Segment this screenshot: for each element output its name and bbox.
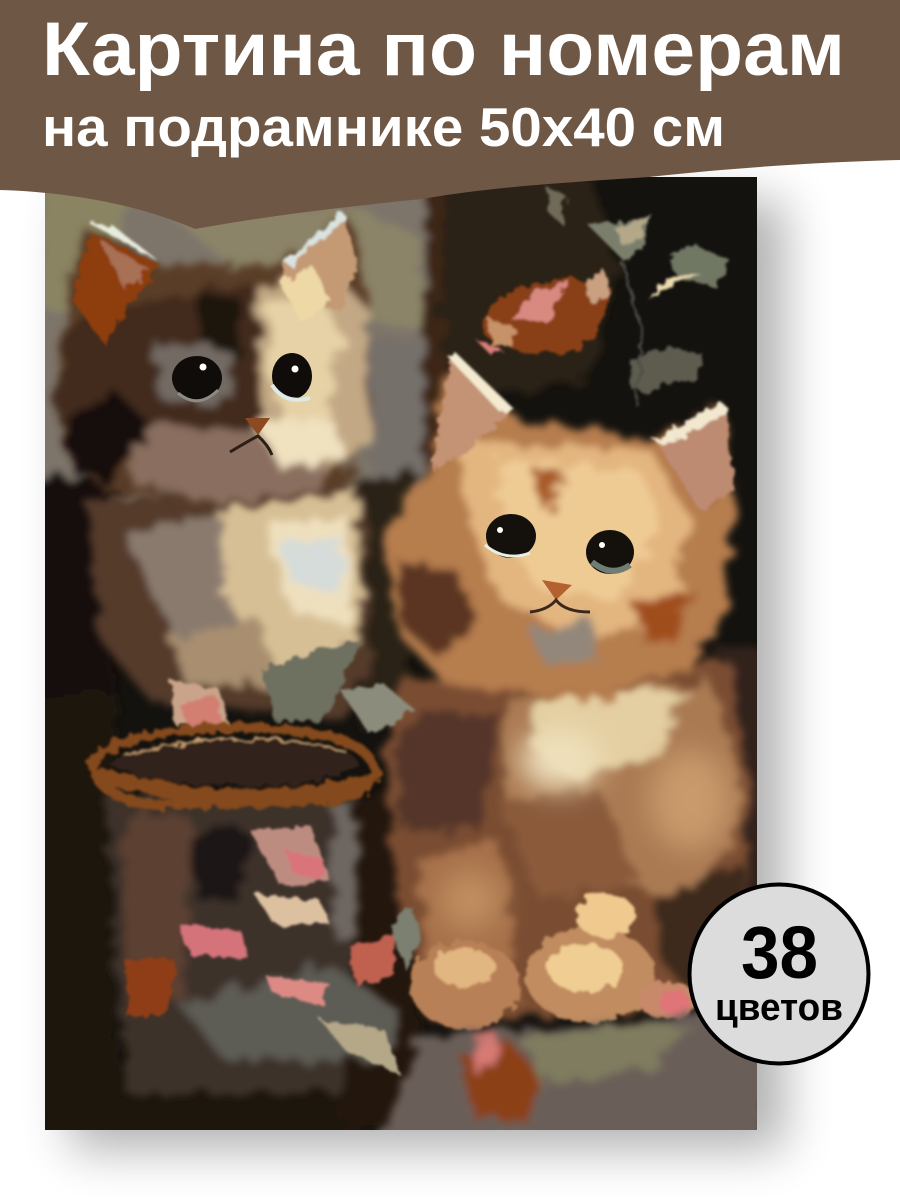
- orange kitten ears: [432, 352, 735, 510]
- header banner: [0, 0, 900, 229]
- grey kitten right eye: [272, 353, 312, 400]
- painting background: [30, 170, 770, 1140]
- grey kitten body: [85, 480, 372, 720]
- grey kitten nose: [230, 418, 272, 455]
- badge number: 38: [741, 911, 818, 994]
- orange kitten right eye: [586, 530, 634, 574]
- floor with petals: [374, 1007, 757, 1130]
- orange kitten body highlights: [440, 730, 730, 930]
- pot flowers: [125, 825, 422, 1075]
- pot rim: [93, 728, 375, 805]
- orange kitten left eye: [485, 514, 536, 558]
- grey kitten ears: [72, 212, 358, 345]
- grey kitten left eye: [172, 356, 222, 401]
- grey kitten head: [55, 215, 372, 505]
- canvas shadow: [70, 200, 785, 1150]
- pot body: [105, 795, 400, 1095]
- orange kitten paws: [410, 893, 695, 1029]
- subtitle: на подрамнике 50х40 см: [42, 96, 725, 158]
- flowers and leaves top right: [474, 185, 732, 405]
- badge label: цветов: [715, 987, 843, 1029]
- title: Картина по номерам: [42, 7, 845, 92]
- orange kitten nose: [530, 580, 590, 612]
- colors badge: [690, 884, 868, 1064]
- grey kitten: [55, 212, 372, 720]
- orange kitten body: [385, 660, 752, 1020]
- glass pot: [93, 728, 422, 1095]
- orange kitten head: [385, 368, 735, 700]
- orange kitten: [385, 352, 752, 1029]
- flower stems above pot: [170, 640, 415, 735]
- painting of two kittens: [30, 170, 770, 1145]
